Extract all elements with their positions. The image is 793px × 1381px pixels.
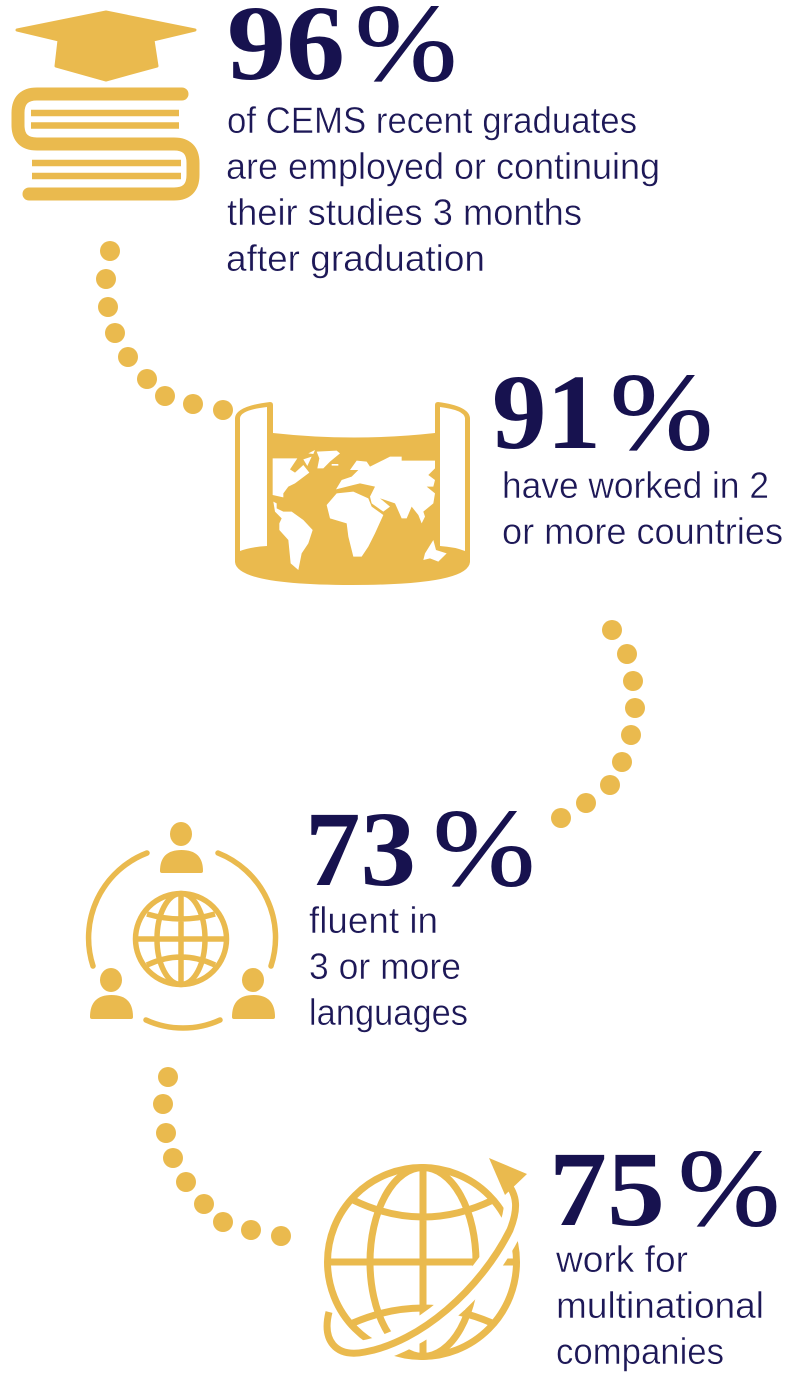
globe <box>135 893 227 985</box>
text: 91% description: have worked in 2 <box>502 465 769 506</box>
continents <box>273 450 447 570</box>
icon: people around globe <box>89 822 276 1028</box>
icon: graduation cap on books <box>17 12 195 194</box>
text: 96% description: are employed or continuing <box>226 146 660 187</box>
dotted path 3 <box>153 1067 291 1246</box>
orbit gap <box>365 1180 516 1352</box>
text: 73% description: 3 or more <box>309 946 461 987</box>
arrowhead <box>489 1158 527 1195</box>
statistic: 91% <box>492 351 713 473</box>
map scroll body <box>235 402 470 585</box>
text: 96% description: their studies 3 months <box>227 192 582 233</box>
text: 96% description <box>226 100 660 279</box>
text: 73% description <box>309 900 468 1033</box>
statistic: 75%: % <box>678 1127 780 1249</box>
dotted path 2 <box>551 620 645 828</box>
text: 96% description: of CEMS recent graduates <box>227 100 637 141</box>
statistic: 96% <box>227 0 457 104</box>
statistic: 91%: % <box>610 351 713 473</box>
text: 91% description <box>502 465 783 552</box>
statistic: 73%: 73 <box>305 791 416 909</box>
graduation cap <box>17 12 195 80</box>
text: 73% description: languages <box>309 992 468 1033</box>
text: 75% description: companies <box>556 1331 724 1372</box>
globe grid <box>328 1168 516 1356</box>
statistic: 75% <box>549 1127 780 1249</box>
statistic: 73%: % <box>433 787 535 909</box>
statistic: 73% <box>305 787 535 909</box>
text: 75% description <box>555 1239 764 1372</box>
text: 91% description: or more countries <box>502 511 783 552</box>
people <box>90 822 275 1019</box>
orbit swoosh <box>327 1182 516 1353</box>
text: 96% description: after graduation <box>226 238 485 279</box>
statistic: 91%: 91 <box>492 354 601 472</box>
text: 73% description: fluent in <box>309 900 438 941</box>
text: 75% description: multinational <box>556 1285 764 1326</box>
icon: world map scroll <box>235 402 470 585</box>
connecting arcs <box>89 853 276 1028</box>
text: 75% description: work for <box>555 1239 688 1280</box>
stacked books <box>18 94 193 194</box>
dotted path 1 <box>96 241 233 420</box>
statistic: 75%: 75 <box>549 1131 665 1249</box>
icon: globe with orbit arrow <box>327 1158 527 1356</box>
